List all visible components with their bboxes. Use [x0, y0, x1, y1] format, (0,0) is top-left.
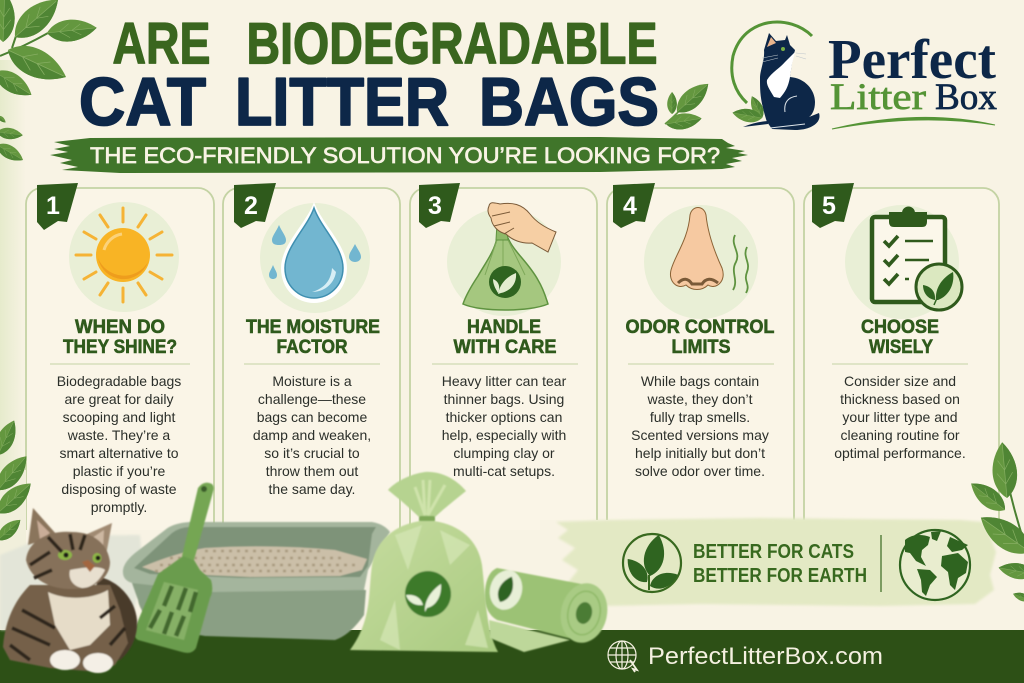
panel: handle with care: [410, 183, 597, 548]
body text: the same day.: [269, 481, 355, 497]
body text: so it’s crucial to: [264, 445, 360, 461]
body text: clumping clay or: [453, 445, 555, 461]
icon: leaf in circle: [622, 533, 681, 592]
number badge 1: [37, 183, 78, 230]
body text: cleaning routine for: [840, 427, 960, 443]
banner text: BETTER FOR EARTH: [693, 564, 867, 587]
brush stroke: [50, 137, 748, 173]
body text: Scented versions may: [631, 427, 769, 443]
icon: website globe: [608, 641, 637, 672]
banner: better for cats, better for earth: [556, 518, 996, 606]
body text: are great for daily: [65, 391, 173, 407]
heading: [861, 316, 939, 358]
icon: hand holding bag: [447, 203, 561, 316]
decoration: right leaves: [965, 441, 1024, 604]
heading: WITH CARE: [454, 336, 556, 358]
body text: waste. They’re a: [67, 427, 170, 443]
panel: the moisture factor: [223, 183, 400, 548]
footer band: [0, 630, 1024, 683]
body text: Consider size and: [844, 373, 956, 389]
body text: help initially but don’t: [635, 445, 765, 461]
title line 1: BIODEGRADABLE: [246, 12, 658, 76]
decoration: top-left leaves: [0, 0, 98, 166]
heading: FACTOR: [276, 336, 348, 358]
background box behind cat: [0, 535, 143, 630]
body text: plastic if you’re: [73, 463, 166, 479]
title line 2: LITTER: [235, 65, 449, 140]
body text: [57, 373, 181, 515]
body text: [253, 373, 371, 497]
panel: choose wisely: [804, 183, 999, 548]
box rim and inside: [123, 522, 390, 592]
body text: fully trap smells.: [650, 409, 750, 425]
heading: [63, 316, 177, 358]
body text: disposing of waste: [61, 481, 177, 497]
stripes: [10, 534, 125, 660]
number badge 1: 1: [46, 192, 60, 220]
body text: promptly.: [91, 499, 147, 515]
body text: solve odor over time.: [635, 463, 765, 479]
body text: challenge—these: [258, 391, 366, 407]
chest: [48, 590, 110, 650]
box body: [132, 583, 366, 640]
banner text: [693, 540, 867, 587]
icon: globe: [900, 530, 970, 600]
number badge 2: [234, 183, 276, 228]
body text: optimal performance.: [834, 445, 966, 461]
cover for lower card parts: [0, 530, 560, 630]
title line 2: BAGS: [479, 65, 659, 140]
panel: when do they shine: [26, 183, 214, 548]
heading: WISELY: [869, 336, 933, 358]
logo swoosh: [832, 117, 995, 129]
heading: ODOR CONTROL: [626, 316, 775, 338]
panel: odor control limits: [607, 183, 794, 548]
body text: bags can become: [257, 409, 367, 425]
body text: scooping and light: [63, 409, 176, 425]
number badge 3: [419, 183, 460, 228]
litter: [142, 546, 367, 577]
title line 2: [79, 65, 659, 140]
illustration: bag roll: [485, 567, 613, 652]
website text: PerfectLitterBox.com: [648, 643, 883, 670]
body text: thicker options can: [446, 409, 562, 425]
body text: multi-cat setups.: [453, 463, 555, 479]
body text: throw them out: [266, 463, 358, 479]
heading: THEY SHINE?: [63, 336, 177, 358]
logo leaves: [747, 94, 767, 120]
illustration: green litter bag: [350, 472, 498, 652]
icon: sun: [69, 202, 179, 312]
subtitle banner: [50, 137, 748, 173]
heading: THE MOISTURE: [246, 316, 380, 338]
banner brush stroke: [556, 518, 996, 606]
ears: [28, 508, 57, 545]
heading: CHOOSE: [861, 316, 939, 338]
title line 2: CAT: [79, 65, 206, 140]
rear body: [60, 577, 137, 665]
body: [3, 585, 128, 672]
icon: title leaf sprig: [665, 77, 714, 132]
body text: thickness based on: [840, 391, 960, 407]
illustration: litter box: [123, 522, 390, 640]
heading: [626, 316, 775, 358]
number badge 3: 3: [428, 192, 442, 220]
body text: thinner bags. Using: [444, 391, 564, 407]
head: [26, 532, 110, 589]
subtitle text: THE ECO-FRIENDLY SOLUTION YOU’RE LOOKING FOR?: [90, 143, 720, 168]
body text: damp and weaken,: [253, 427, 371, 443]
number badge 5: [812, 183, 854, 228]
logo: Perfect Litter Box: [731, 22, 997, 130]
background wash: left edge: [0, 60, 26, 540]
heading: [454, 316, 556, 358]
number badge 4: [613, 183, 655, 228]
icon: nose with smell lines: [644, 205, 758, 319]
banner text: BETTER FOR CATS: [693, 540, 854, 563]
front paws: [50, 650, 80, 670]
title line 1: ARE: [112, 12, 210, 76]
body text: While bags contain: [641, 373, 759, 389]
logo wordmark: Perfect: [828, 29, 996, 91]
number badge 5: 5: [822, 192, 836, 220]
illustration: tabby cat: [3, 508, 137, 673]
logo: Perfect Litter Box: Litter: [830, 77, 926, 118]
illustration: litter scoop: [134, 483, 214, 653]
body text: help, especially with: [442, 427, 566, 443]
decoration: left-middle leaves: [0, 417, 37, 545]
body text: Heavy litter can tear: [442, 373, 567, 389]
logo: Perfect Litter Box: Box: [935, 77, 997, 118]
body text: smart alternative to: [59, 445, 179, 461]
heading: LIMITS: [672, 336, 730, 358]
body text: [442, 373, 567, 479]
logo cat: [743, 33, 820, 130]
title: [79, 12, 659, 140]
number badge 2: 2: [244, 192, 258, 220]
heading: HANDLE: [467, 316, 541, 338]
body text: waste, they don’t: [646, 391, 753, 407]
heading: [246, 316, 380, 358]
icon: water drop: [260, 202, 370, 313]
body text: [631, 373, 769, 479]
logo arc: [732, 22, 812, 103]
body text: Biodegradable bags: [57, 373, 181, 389]
heading: WHEN DO: [75, 316, 165, 338]
body text: your litter type and: [842, 409, 958, 425]
number badge 4: 4: [623, 192, 637, 220]
body text: Moisture is a: [272, 373, 352, 389]
body text: [834, 373, 966, 461]
icon: clipboard with leaf badge: [845, 205, 962, 319]
title line 1: [112, 12, 658, 76]
